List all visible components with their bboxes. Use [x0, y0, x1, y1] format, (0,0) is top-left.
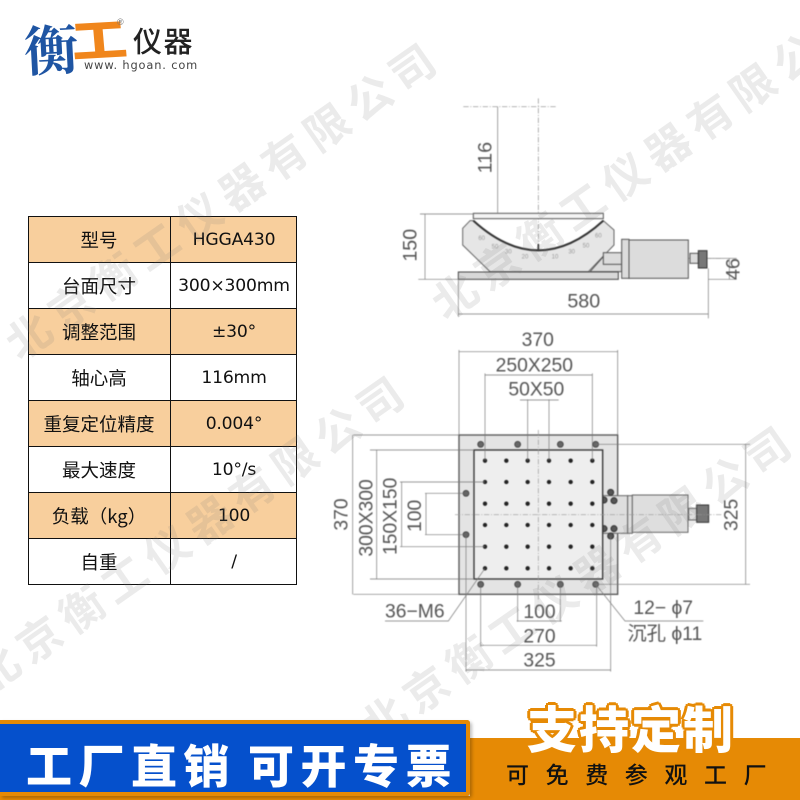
custom support heading: 支持定制	[527, 691, 735, 763]
logo url: www. hgoan. com	[84, 58, 198, 72]
angle scale labels: 50	[492, 245, 499, 251]
row: table size: 300×300mm	[178, 276, 290, 296]
dimension 150: 150	[400, 229, 422, 262]
label 12-phi7: 12− ϕ7	[633, 598, 693, 619]
angle scale labels: 30	[568, 249, 576, 255]
logo mark: orange character: 工	[68, 4, 130, 72]
motor	[590, 239, 707, 278]
banner headline right: 可开专票	[248, 731, 458, 797]
row: adjustment range: 调整范围	[62, 318, 136, 344]
banner: bottom strip	[0, 796, 470, 800]
row: max speed	[62, 447, 256, 492]
label 370 top: 370	[522, 330, 554, 351]
row: load: 100	[218, 506, 250, 526]
angle scale labels	[478, 233, 602, 260]
watermark line 4: 北京衡工仪器有限公司	[353, 415, 800, 753]
logo name: 仪器	[133, 19, 194, 61]
label 100 left: 100	[405, 500, 426, 532]
label counterbore: 沉孔 ϕ11	[627, 623, 702, 645]
label 300X300: 300X300	[356, 479, 377, 557]
row: model	[28, 217, 297, 263]
base plate plan	[459, 435, 618, 594]
label 325 right: 325	[722, 499, 743, 531]
banner headline left: 工厂直销	[26, 731, 236, 797]
logo mark: blue character: 衡	[22, 8, 80, 87]
row: model: HGGA430	[193, 230, 275, 250]
row: repeat accuracy: 0.004°	[206, 414, 262, 434]
centre lines plan	[455, 430, 722, 602]
row: weight: /	[231, 552, 237, 572]
centre lines	[463, 98, 723, 278]
row: repeat accuracy	[28, 401, 297, 447]
label 150X150: 150X150	[381, 478, 402, 555]
row: axis height	[71, 355, 267, 400]
dimension 116: 116	[475, 142, 497, 173]
spec table	[28, 216, 297, 585]
label 100 bottom: 100	[523, 602, 556, 623]
row: axis height: 轴心高	[71, 364, 127, 390]
label 50X50: 50X50	[508, 380, 564, 401]
logo registered mark: ®	[117, 17, 124, 27]
row: load: 负载（kg）	[52, 502, 146, 528]
row: weight	[80, 539, 237, 584]
row: load	[28, 493, 297, 539]
banner: orange strip	[470, 738, 800, 800]
side view dimensions	[400, 107, 744, 318]
angle scale labels: 30	[505, 249, 512, 255]
motor plan	[601, 489, 709, 539]
row: model: 型号	[80, 226, 118, 252]
logo	[22, 4, 198, 87]
label 36-M6: 36−M6	[385, 601, 445, 622]
row: axis height: 116mm	[201, 368, 267, 388]
label 325 bottom: 325	[523, 651, 556, 672]
label 270: 270	[523, 626, 556, 647]
base plate	[458, 272, 618, 279]
dimension 46: 46	[722, 258, 744, 280]
angle scale labels: 60	[478, 236, 486, 242]
watermark line 1: 北京衡工仪器有限公司	[0, 32, 452, 370]
mounting hole grid	[483, 458, 594, 570]
plan view drawing	[331, 330, 750, 672]
tilt stage body	[463, 221, 614, 272]
row: weight: 自重	[80, 548, 118, 574]
factory visit caption: 可免费参观工厂	[506, 756, 783, 790]
plan view dimensions	[331, 330, 750, 672]
angle scale labels: 10	[552, 254, 559, 260]
angle scale labels: 20	[522, 254, 529, 260]
row: max speed: 最大速度	[62, 456, 136, 482]
row: adjustment range	[28, 309, 297, 355]
banner: factory direct	[0, 720, 470, 796]
label 370 left: 370	[331, 498, 352, 531]
angle scale labels: 60	[595, 233, 602, 239]
row: table size	[62, 263, 290, 308]
row: table size: 台面尺寸	[62, 272, 136, 298]
table top and cradle arc	[473, 213, 603, 250]
row: max speed: 10°/s	[212, 460, 256, 480]
top plate plan	[474, 450, 603, 579]
angle scale labels: 50	[583, 243, 590, 249]
label 250X250: 250X250	[496, 355, 573, 376]
row: adjustment range: ±30°	[212, 322, 256, 342]
row: repeat accuracy: 重复定位精度	[43, 410, 154, 436]
dimension 580: 580	[567, 290, 600, 312]
counterbored holes	[463, 441, 599, 587]
